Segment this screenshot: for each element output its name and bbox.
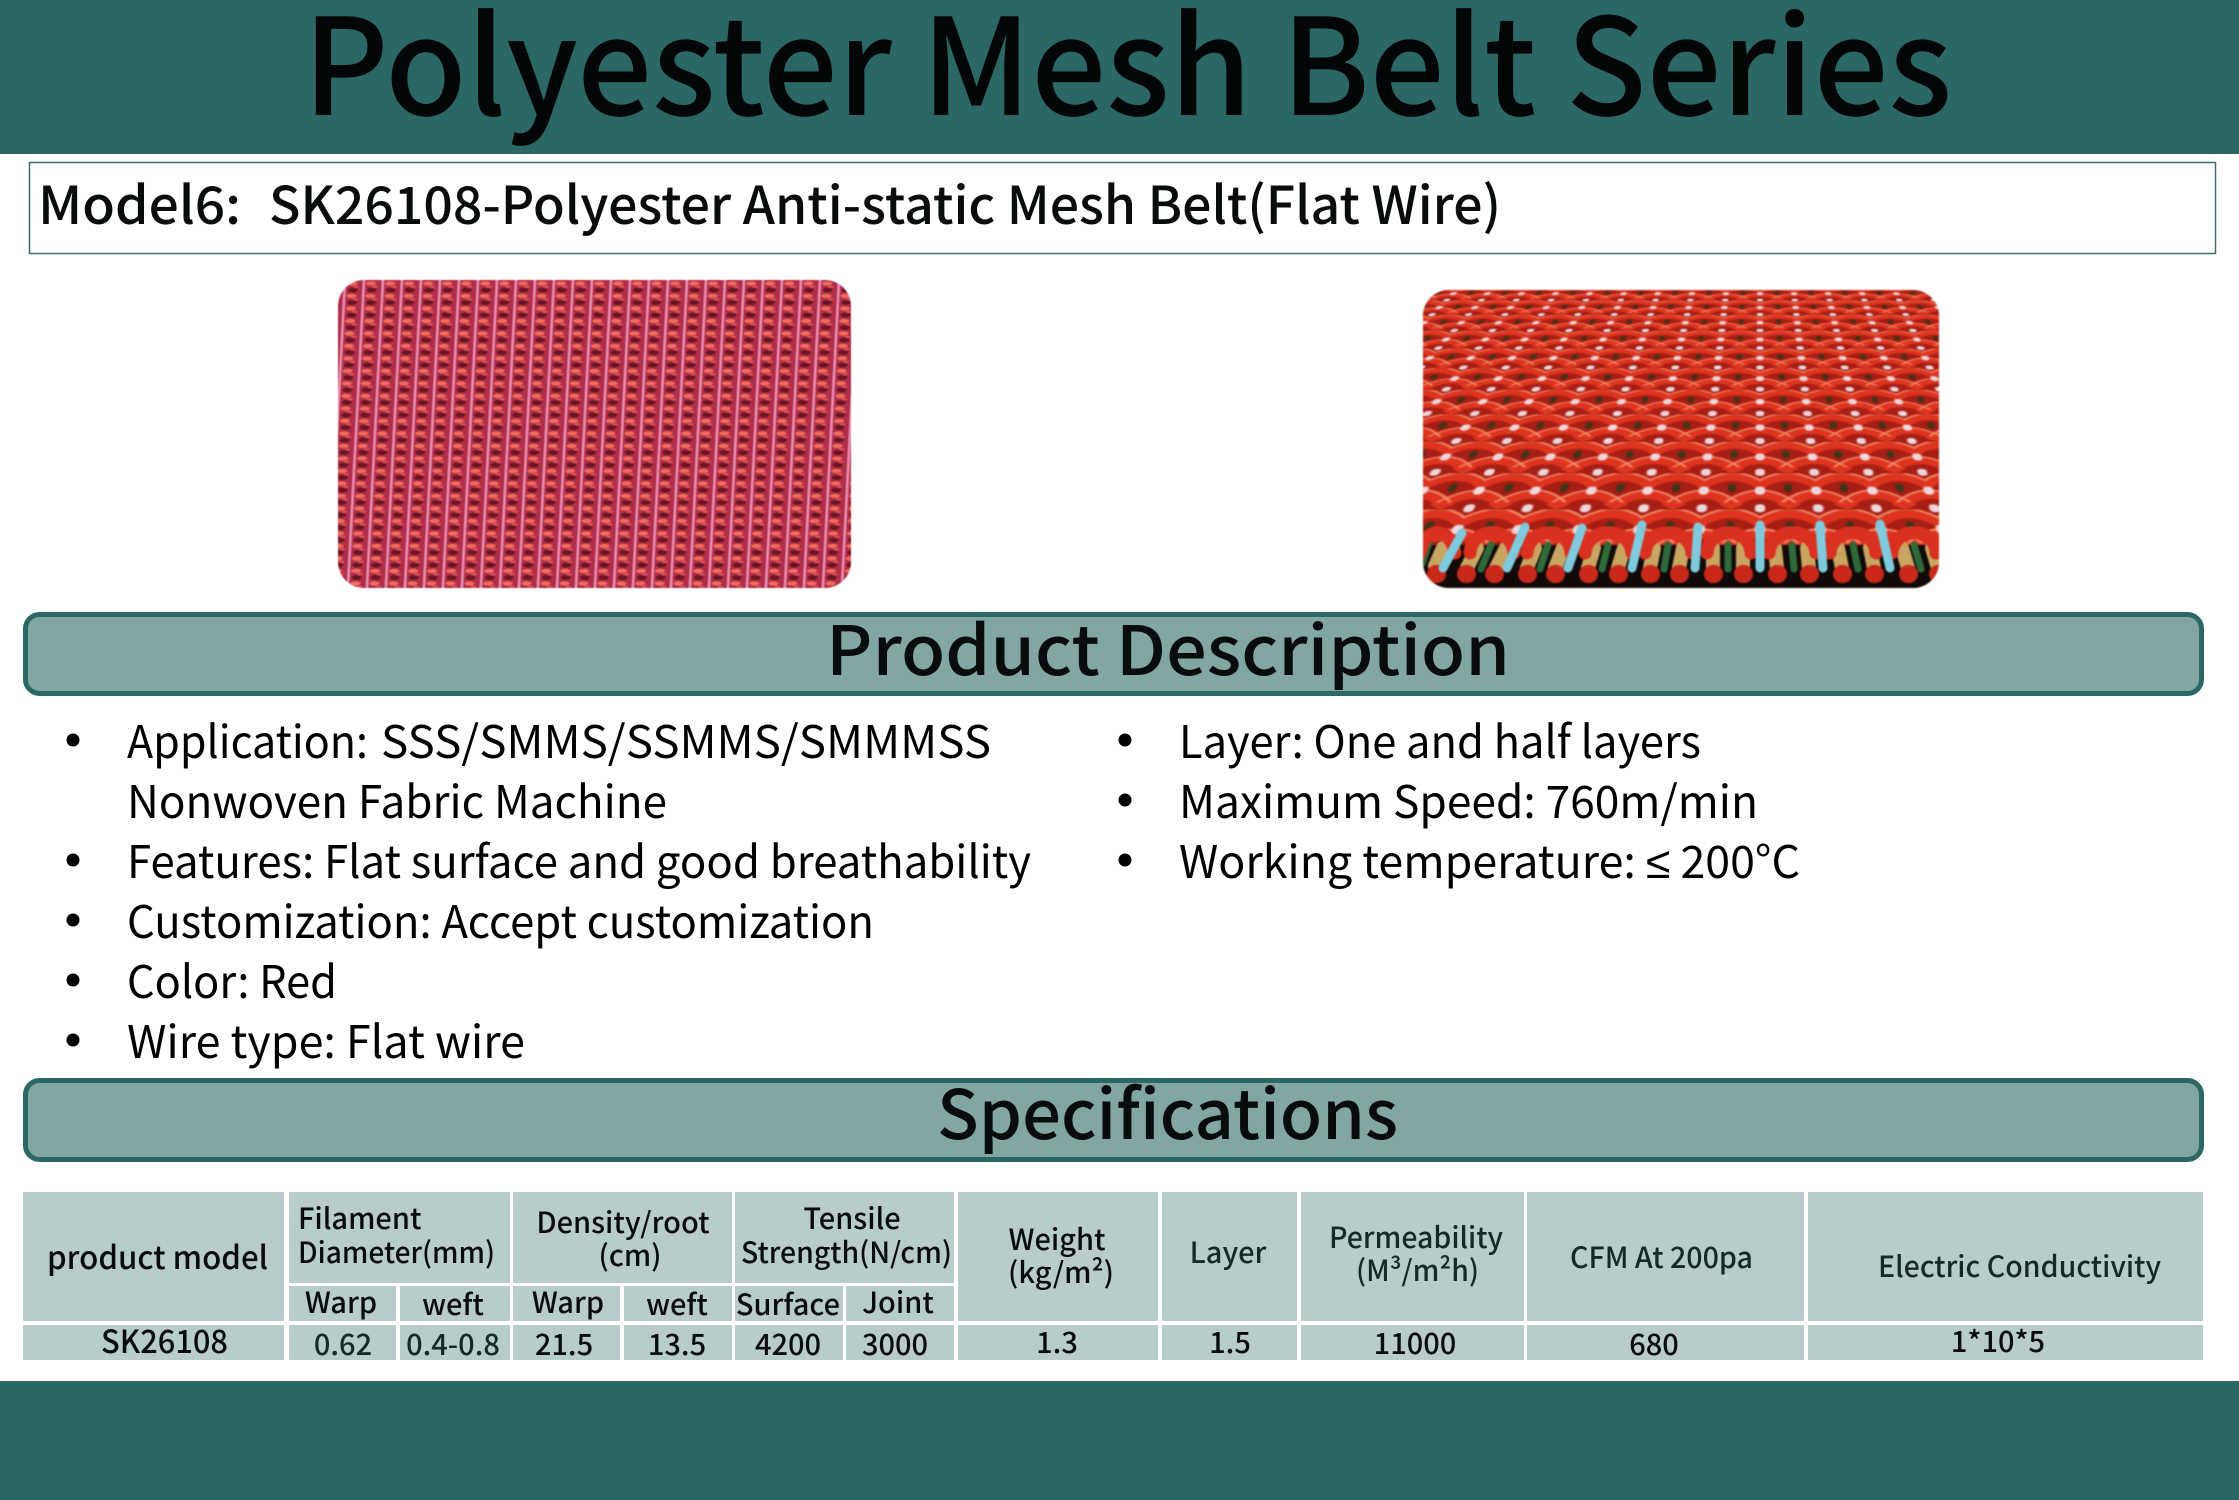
table data row: 1*10*5 (1951, 1319, 2045, 1361)
description bullets: right column: Layer: One and half layers (1179, 706, 1701, 771)
model title box: SK26108-Polyester Anti-static Mesh Belt(Flat Wire) (269, 164, 1501, 239)
bottom banner (0, 1381, 2239, 1500)
table data row: 4200 (755, 1322, 821, 1364)
table header labels: (cm) (598, 1233, 662, 1275)
table header labels: Density/root (536, 1200, 710, 1242)
description bullets: left column: Color: Red (127, 946, 337, 1011)
section bar: Specifications (26, 1060, 2202, 1160)
table data row (101, 1317, 2045, 1364)
photo: flat mesh belt texture (338, 280, 851, 588)
table cell backgrounds (23, 1192, 2203, 1360)
description bullets: left column: Nonwoven Fabric Machine (127, 766, 667, 831)
specifications table (23, 1192, 2203, 1364)
description bullets: left column: SSS/SMMS/SSMMS/SMMMSS (381, 706, 991, 771)
table data row: 680 (1629, 1322, 1679, 1364)
description bullets: left column: Customization: Accept customization (127, 886, 874, 951)
table header labels: Permeability (1329, 1215, 1503, 1257)
table header labels: Diameter(mm) (298, 1230, 495, 1272)
section bar: Product Description (26, 596, 2202, 695)
table data row: 0.62 (314, 1322, 372, 1364)
description bullets: left column: Features: Flat surface and good breathability (127, 826, 1031, 891)
table header labels: Joint (862, 1280, 934, 1322)
table header labels: CFM At 200pa (1570, 1235, 1753, 1277)
table data row: SK26108 (101, 1317, 228, 1363)
description bullets: right column (1118, 706, 1800, 891)
blue warp wires (1443, 524, 1890, 568)
table header labels: Electric Conductivity (1878, 1244, 2161, 1286)
table header labels (47, 1196, 2161, 1324)
table header labels: Surface (736, 1282, 840, 1324)
model title box (30, 162, 2216, 254)
arches (1420, 533, 1936, 553)
photo: mesh belt close-up (1423, 290, 1939, 588)
table header labels: Filament (298, 1196, 422, 1238)
tan legs (1435, 548, 1938, 568)
description bullets: right column: Working temperature: ≤ 200°C (1179, 826, 1800, 891)
table header labels: weft (422, 1282, 484, 1324)
table header labels: (kg/m²) (1008, 1250, 1114, 1292)
table header labels: Warp (532, 1280, 604, 1322)
description bullets: left column: Application: (127, 706, 368, 771)
table data row: 21.5 (535, 1322, 593, 1364)
table data row: 1.3 (1036, 1320, 1078, 1362)
section bar: Specifications: Specifications (937, 1060, 1398, 1159)
table data row: 1.5 (1209, 1320, 1251, 1362)
red wire feet (1436, 565, 1939, 583)
table header labels: product model (47, 1233, 268, 1279)
top banner (0, 0, 2239, 154)
table data row: 0.4-0.8 (406, 1322, 500, 1364)
description bullets: left column (66, 706, 1031, 1071)
table data row: 3000 (862, 1322, 928, 1364)
description bullets: right column: Maximum Speed: 760m/min (1179, 766, 1758, 831)
table data row: 13.5 (648, 1322, 706, 1364)
table data row: 11000 (1374, 1321, 1456, 1363)
table header labels: Layer (1190, 1230, 1267, 1272)
description bullets: left column: Wire type: Flat wire (127, 1006, 525, 1071)
table header labels: Warp (305, 1280, 377, 1322)
model title box: Model6: (38, 164, 241, 239)
table header labels: Weight (1009, 1217, 1106, 1259)
table header labels: Strength(N/cm) (741, 1230, 952, 1272)
table header labels: Tensile (803, 1196, 901, 1238)
table header labels: (M³/m²h) (1356, 1248, 1479, 1290)
green inner wires (1422, 540, 1921, 569)
section bar: Product Description: Product Description (826, 596, 1510, 695)
table header labels: weft (646, 1282, 708, 1324)
